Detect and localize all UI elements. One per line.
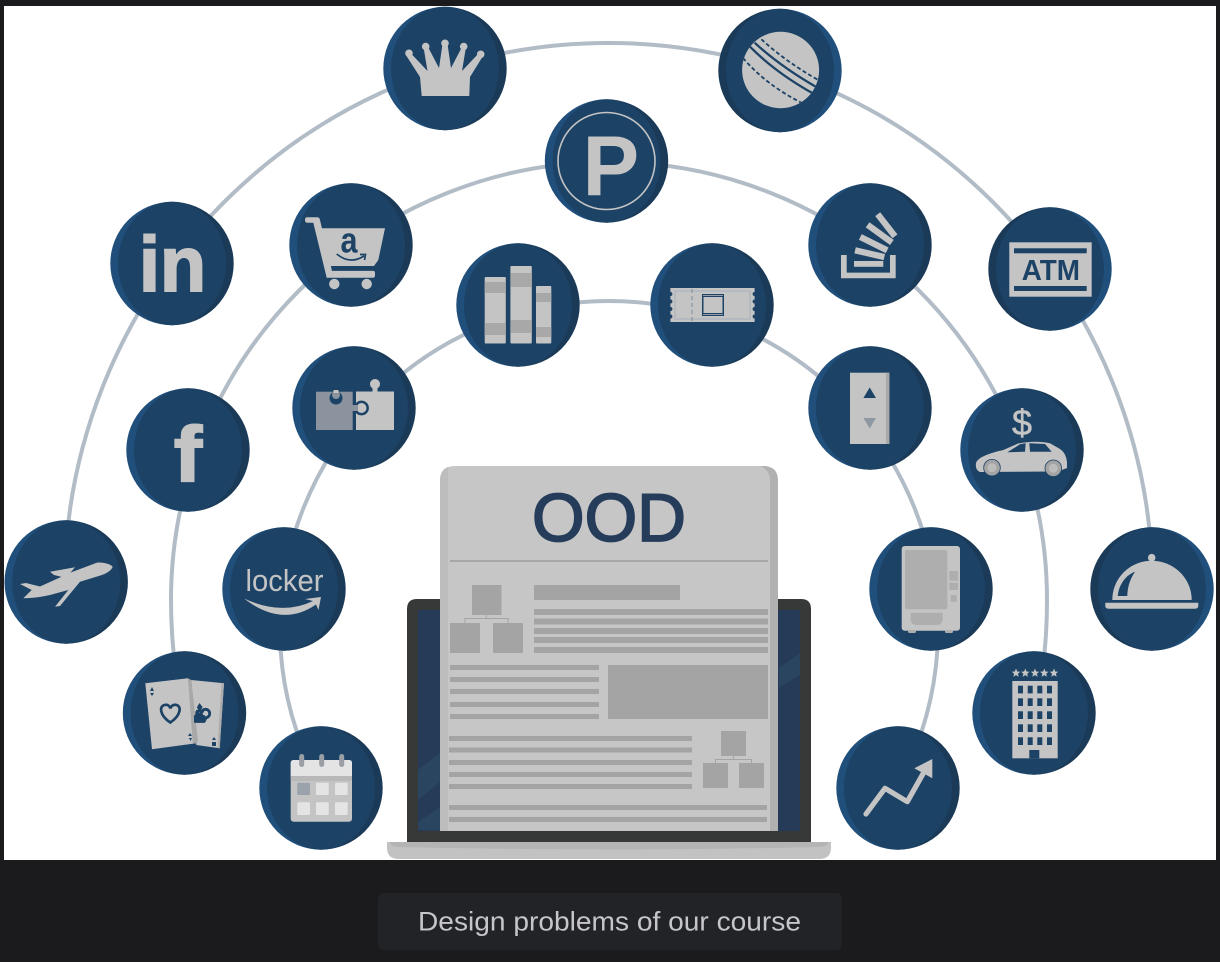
- icon: food cloche: [1090, 527, 1214, 651]
- icon: facebook: f: [174, 410, 203, 498]
- icon: books: [456, 243, 580, 367]
- icon: car price: $: [1012, 402, 1032, 443]
- text block lower: [449, 736, 692, 789]
- text block middle: [450, 665, 599, 719]
- icon: amazon locker: [222, 527, 346, 651]
- icon: calendar: [259, 726, 383, 850]
- icon: elevator buttons: [808, 346, 932, 470]
- icon: movie ticket: [650, 243, 774, 367]
- diagram bottom: [703, 731, 764, 788]
- laptop screen: [418, 610, 800, 831]
- icon: ATM: ATM: [1022, 255, 1080, 287]
- icon: stock trend: [836, 726, 960, 850]
- middle connection arc: [169, 164, 1049, 653]
- icon: stack overflow: [808, 183, 932, 307]
- icon: amazon cart: [289, 183, 413, 307]
- icon: vending machine: [869, 527, 993, 651]
- icon: parking: [545, 99, 668, 223]
- icon: linkedin: [110, 202, 234, 325]
- text block top: [534, 585, 768, 653]
- laptop frame: [407, 599, 811, 842]
- caption text: Design problems of our course: [418, 906, 801, 936]
- icon: ATM: [988, 207, 1112, 331]
- icon: playing cards: [123, 651, 246, 775]
- icon: linkedin: in: [139, 220, 206, 308]
- icon: puzzle: [292, 346, 416, 470]
- icon: amazon locker: locker: [246, 563, 324, 598]
- icon: airplane: [4, 520, 128, 644]
- laptop: [387, 599, 831, 859]
- diagram top: [450, 585, 523, 653]
- icon: crown: [383, 7, 507, 130]
- inner connection arc: [278, 299, 940, 732]
- document page: [440, 466, 778, 831]
- icon: hotel: [972, 651, 1096, 775]
- outer connection arc: [66, 41, 1152, 528]
- icon: amazon cart: a: [340, 220, 358, 261]
- text block bottom: [449, 805, 767, 822]
- icon: cricket ball: [718, 9, 842, 132]
- icon: car price: [960, 388, 1084, 512]
- caption box: [378, 893, 842, 950]
- image placeholder: [608, 665, 768, 719]
- screen reflections: [418, 653, 800, 830]
- title: OOD: [532, 480, 686, 556]
- icon: parking: P: [582, 119, 639, 214]
- icon: facebook: [126, 388, 250, 512]
- laptop base: [387, 842, 831, 859]
